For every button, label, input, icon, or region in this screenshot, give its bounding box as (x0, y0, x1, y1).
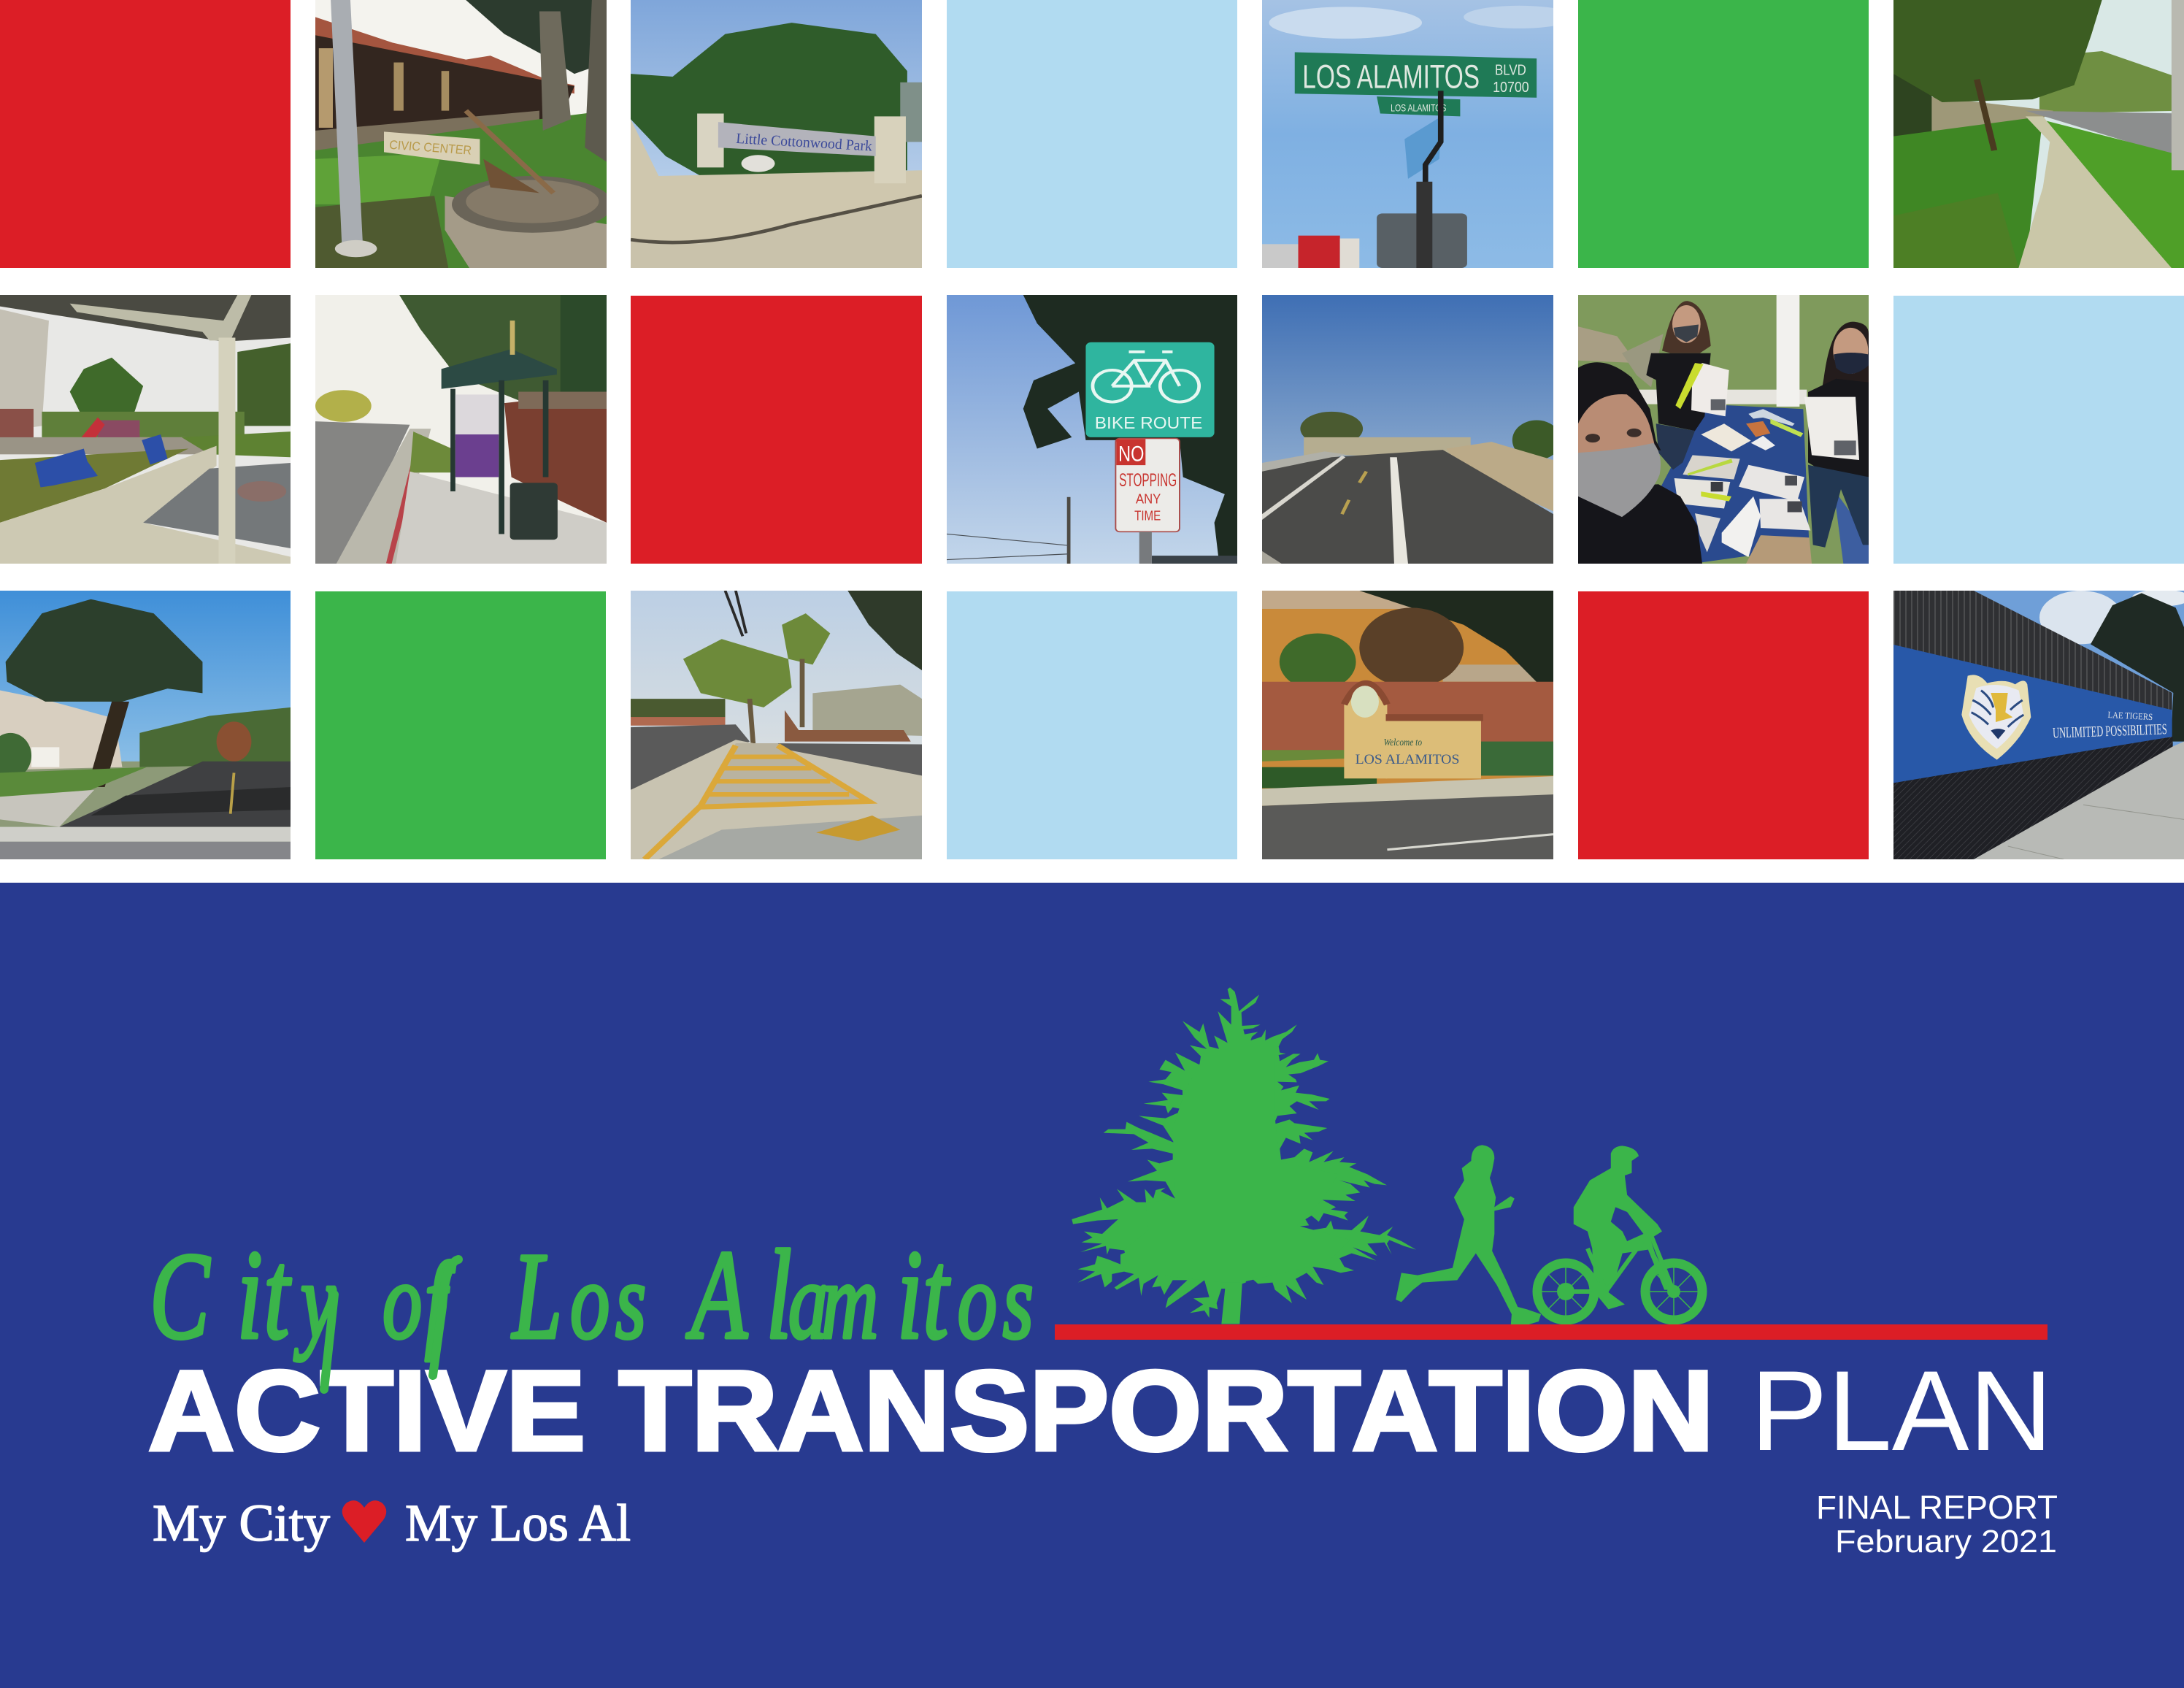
heading: City of Los Alamitos: i (237, 1224, 263, 1365)
tagline: My City love My Los Al: My City (153, 1494, 330, 1552)
icon: bicycle on sign (1093, 352, 1199, 402)
photo: civic center and sundial (315, 0, 607, 268)
person: woman with clipboard, right (1804, 322, 1869, 548)
icon: cyclist silhouette (1574, 1146, 1674, 1309)
tile: red square (631, 296, 922, 564)
photo: Los Alamitos street sign: BLVD (1495, 62, 1526, 78)
photo: civic center and sundial: CIVIC CENTER (388, 139, 472, 158)
heading: City of Los Alamitos: y (294, 1241, 337, 1362)
photo: Welcome to Los Alamitos monument: Welcome to (1384, 737, 1422, 748)
heading: City of Los Alamitos: am (788, 1241, 878, 1362)
red ground bar (1055, 1324, 2048, 1340)
photo: bike route sign: BIKE ROUTE (1095, 413, 1202, 433)
panel: blue title block (0, 883, 2184, 1688)
heading: City of Los Alamitos (150, 1224, 1034, 1365)
tile: green square (315, 591, 606, 859)
heading: Active Transportation Plan: ACTIVE TRANSPORTATION (148, 1348, 1714, 1475)
photo: Los Alamitos street sign (1262, 0, 1553, 268)
tile: light blue square (947, 591, 1237, 859)
table papers (1674, 409, 1812, 564)
heading: City of Los Alamitos: t (923, 1224, 950, 1365)
heading: Active Transportation Plan: PLAN (1750, 1348, 2053, 1475)
banner (1893, 645, 2172, 783)
photo: Welcome to Los Alamitos monument: LOS ALAMITOS (1356, 751, 1459, 767)
tagline: My City love My Los Al (153, 1494, 631, 1552)
tile: red square (1578, 591, 1869, 859)
heading: City of Los Alamitos: os (958, 1241, 1034, 1362)
photo: outreach team at table (1578, 295, 1869, 564)
photo grid (0, 0, 2184, 859)
report label and date: February 2021 (1835, 1524, 2057, 1560)
photo: Welcome to Los Alamitos monument (1262, 591, 1553, 859)
icon: runner silhouette (1396, 1145, 1541, 1327)
heading: City of Los Alamitos: of (382, 1241, 456, 1362)
heading: City of Los Alamitos: C (150, 1228, 211, 1365)
photo: bike route sign: NO (1118, 442, 1144, 467)
photo: residential street with tree (0, 591, 291, 859)
person: woman with clipboard, back (1646, 301, 1729, 469)
icon: bicycle wheels and frame (1537, 1223, 1702, 1320)
photo: bus stop shelter (315, 295, 607, 564)
photo: bike route sign (947, 295, 1237, 564)
heading: City of Los Alamitos: l (766, 1224, 792, 1365)
icon: evergreen tree (1072, 987, 1416, 1324)
icon: tiger logo (1961, 675, 2031, 760)
heading: City of Los Alamitos: t (264, 1224, 291, 1365)
photo: bike route sign: ANY (1136, 491, 1161, 507)
photo: Little Cottonwood Park sign: Little Cottonwood Park (735, 130, 874, 154)
descender strokes of script y and f (324, 1259, 458, 1389)
icon: red heart (342, 1500, 386, 1543)
tagline: My City love My Los Al: My Los Al (405, 1494, 631, 1552)
heading: City of Los Alamitos: A (685, 1224, 747, 1365)
banner: LAE TIGERS (2107, 710, 2153, 722)
photo: sidewalk along lawn (1893, 0, 2184, 268)
photo: Los Alamitos street sign: LOS ALAMITOS (1391, 103, 1446, 114)
person: man with mask, foreground (1578, 362, 1702, 564)
photo: road with bike path (1262, 295, 1553, 564)
tile: red square (0, 0, 291, 268)
heading: City of Los Alamitos: os (570, 1241, 646, 1362)
tile: light blue square (1893, 296, 2184, 564)
photo: Little Cottonwood Park sign (631, 0, 922, 268)
photo: Los Alamitos street sign: 10700 (1493, 79, 1529, 95)
photo: bike route sign: STOPPING (1119, 470, 1177, 490)
photo: bike route sign: TIME (1134, 509, 1161, 523)
report label and date: FINAL REPORT (1816, 1489, 2058, 1526)
photo: yellow crosswalk (631, 591, 922, 859)
tile: green square (1578, 0, 1869, 268)
report label and date (1816, 1489, 2058, 1560)
heading: City of Los Alamitos: L (511, 1228, 562, 1365)
heading: City of Los Alamitos: i (897, 1224, 923, 1365)
photo: LAE Tigers banner on fence (1893, 591, 2184, 859)
icon: runner and cyclist (1396, 1145, 1702, 1327)
photo: playground and shelter (0, 295, 291, 564)
tile: light blue square (947, 0, 1237, 268)
